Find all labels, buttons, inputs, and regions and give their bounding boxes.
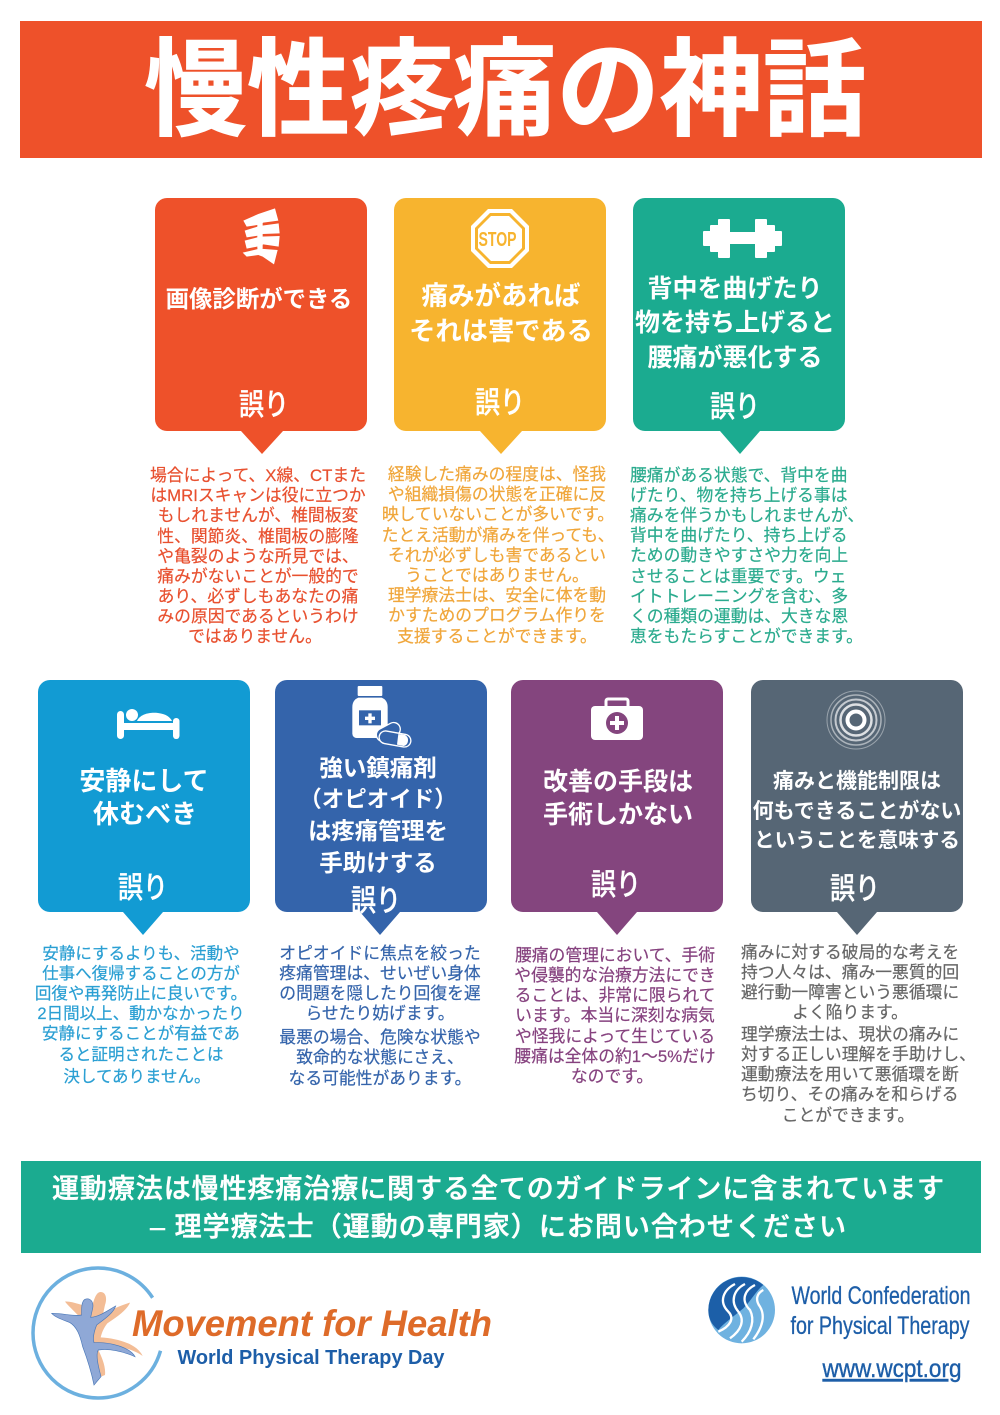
panel: opioid myth card: 手助けする <box>319 850 437 876</box>
icon: spine <box>243 208 280 264</box>
text: surgery explanation <box>514 946 716 1086</box>
text: imaging explanation: 場合によって、X線、CTまた <box>150 466 366 485</box>
panel: pain means harm myth card: 痛みがあれば <box>422 281 581 311</box>
text: pain and harm explanation <box>382 465 614 646</box>
text: bending and lifting explanation: ための動きやすさや力を向上 <box>630 546 848 565</box>
text: pain and harm explanation: や組織損傷の状態を正確に反 <box>388 485 606 504</box>
text: bending and lifting explanation: くの種類の運動は、大きな恩 <box>630 607 848 626</box>
text: surgery explanation: や侵襲的な治療方法にでき <box>514 966 716 985</box>
logo: Movement for Health: Movement for Health <box>132 1303 492 1344</box>
text: opioid explanation: 疼痛管理は、せいぜい身体 <box>279 964 481 983</box>
text: surgery explanation: 腰痛の管理において、手術 <box>515 946 715 965</box>
text: imaging explanation: あり、必ずしもあなたの痛 <box>158 587 358 606</box>
panel: pain and disability myth card <box>751 680 963 935</box>
panel: pain means harm myth card: 誤り <box>475 387 525 420</box>
icon: radiating pain target <box>827 691 885 749</box>
text: imaging explanation: 性、関節炎、椎間板の膨隆 <box>157 527 359 546</box>
text: surgery explanation: なのです。 <box>571 1067 653 1086</box>
panel: bending and lifting myth card: 誤り <box>710 391 760 424</box>
text: imaging explanation: 痛みがないことが一般的で <box>157 567 359 586</box>
text: rest explanation: 回復や再発防止に良いです。 <box>35 984 247 1003</box>
panel: pain means harm myth card <box>394 198 606 454</box>
text: pain and disability explanation: 痛みに対する破局的な考えを <box>741 943 959 962</box>
text: bending and lifting explanation: げたり、物を持ち上げる事は <box>630 486 848 505</box>
panel: opioid myth card: 誤り <box>351 885 401 918</box>
panel: rest myth card: 誤り <box>118 872 168 905</box>
panel: bending and lifting myth card: 物を持ち上げると <box>635 309 835 337</box>
icon: pill bottle and capsules <box>352 686 412 748</box>
text: rest explanation: 安静にすることが有益であ <box>42 1024 240 1043</box>
text: surgery explanation: 腰痛は全体の約1～5%だけ <box>514 1047 716 1066</box>
text: pain and disability explanation: ことができます。 <box>782 1106 914 1125</box>
icon: dumbbell <box>703 219 782 258</box>
logo: Movement for Health <box>33 1268 492 1398</box>
logo: World Confederation for Physical Therapy: www.wcpt.org <box>822 1355 962 1383</box>
text: pain and disability explanation: 理学療法士は、現状の痛みに <box>741 1025 959 1044</box>
icon: stop sign: STOP <box>478 229 516 251</box>
panel: opioid myth card <box>275 680 487 935</box>
icon: stop sign <box>471 209 529 268</box>
text: pain and harm explanation: たとえ活動が痛みを伴っても、 <box>382 526 614 545</box>
text: opioid explanation: の問題を隠したり回復を遅 <box>279 984 481 1003</box>
logo: Movement for Health: World Physical Therapy Day <box>178 1347 445 1369</box>
callout: exercise therapy banner <box>21 1161 981 1253</box>
text: pain and harm explanation: 経験した痛みの程度は、怪我 <box>388 465 606 484</box>
text: surgery explanation: ることは、非常に限られて <box>515 986 715 1005</box>
panel: bending and lifting myth card: 背中を曲げたり <box>647 275 823 303</box>
text: bending and lifting explanation: 背中を曲げたり、持ち上げる <box>630 526 848 545</box>
text: pain and disability explanation: 運動療法を用いて悪循環を断 <box>741 1065 959 1084</box>
panel: pain means harm myth card: それは害である <box>409 316 593 346</box>
text: rest explanation: 決してありません。 <box>63 1067 211 1086</box>
text: opioid explanation: なる可能性があります。 <box>289 1069 471 1088</box>
panel: rest myth card <box>38 680 250 935</box>
panel: pain and disability myth card: 何もできることがない <box>753 799 961 823</box>
callout: exercise therapy banner: – 理学療法士（運動の専門家）にお問い合わせください <box>150 1212 846 1242</box>
panel: pain and disability myth card: ということを意味する <box>754 829 960 852</box>
text: imaging explanation <box>150 466 366 646</box>
text: rest explanation: 2日間以上、動かなかったり <box>37 1004 245 1023</box>
text: pain and disability explanation: 避行動一障害という悪循環に <box>741 983 959 1002</box>
panel: bending and lifting myth card: 腰痛が悪化する <box>647 343 823 372</box>
icon: WCPT globe <box>708 1277 775 1343</box>
panel: imaging myth card <box>155 198 367 454</box>
text: pain and harm explanation: 映していないことが多いです。 <box>382 505 614 524</box>
text: surgery explanation: や怪我によって生じている <box>515 1027 715 1046</box>
text: opioid explanation: オピオイドに焦点を絞った <box>279 944 481 963</box>
icon: bed <box>117 709 180 739</box>
icon: first aid kit <box>591 699 643 740</box>
panel: opioid myth card: は疼痛管理を <box>308 818 448 844</box>
text: opioid explanation: らせたり妨げます。 <box>305 1004 455 1023</box>
panel: opioid myth card: （オピオイド） <box>299 787 457 812</box>
text: pain and harm explanation: それが必ずしも害であるとい <box>388 546 606 565</box>
text: bending and lifting explanation: させることは重要です。ウェ <box>630 567 846 586</box>
text: pain and harm explanation: 支援することができます。 <box>397 627 597 646</box>
text: rest explanation: ると証明されたことは <box>58 1045 224 1064</box>
text: surgery explanation: います。本当に深刻な病気 <box>515 1006 715 1025</box>
text: rest explanation: 仕事へ復帰することの方が <box>42 964 240 983</box>
text: imaging explanation: もしれませんが、椎間板変 <box>158 506 358 525</box>
text: imaging explanation: や亀裂のような所見では、 <box>157 547 359 566</box>
text: imaging explanation: はMRIスキャンは役に立つか <box>150 486 366 505</box>
text: bending and lifting explanation: 恵をもたらすことができます。 <box>630 627 863 646</box>
text: opioid explanation: 致命的な状態にさえ、 <box>296 1048 464 1067</box>
icon: orange and blue figures <box>52 1292 143 1385</box>
text: bending and lifting explanation: 痛みを伴うかもしれませんが、 <box>630 506 864 525</box>
text: opioid explanation <box>279 944 481 1088</box>
panel: bending and lifting myth card <box>633 198 845 454</box>
text: pain and disability explanation <box>741 943 976 1125</box>
text: pain and disability explanation: 対する正しい理解を手助けし、 <box>741 1045 976 1064</box>
text: pain and disability explanation: よく陥ります。 <box>792 1003 908 1022</box>
panel: rest myth card: 安静にして <box>79 766 209 796</box>
text: pain and harm explanation: うことではありません。 <box>405 566 589 585</box>
text: opioid explanation: 最悪の場合、危険な状態や <box>279 1028 481 1047</box>
panel: imaging myth card: 画像診断ができる <box>166 285 352 312</box>
panel: surgery myth card: 改善の手段は <box>543 768 693 796</box>
callout: exercise therapy banner: 運動療法は慢性疼痛治療に関する全てのガイドラインに含まれています <box>52 1174 944 1204</box>
logo: World Confederation for Physical Therapy <box>708 1277 970 1383</box>
title banner <box>20 21 982 158</box>
text: bending and lifting explanation: 腰痛がある状態で、背中を曲 <box>630 466 848 485</box>
text: rest explanation: 安静にするよりも、活動や <box>42 944 240 963</box>
text: imaging explanation: みの原因であるというわけ <box>157 607 359 626</box>
text: pain and disability explanation: 持つ人々は、痛み一悪質的回 <box>741 963 959 982</box>
title banner: 慢性疼痛の神話 <box>144 32 866 150</box>
panel: pain and disability myth card: 痛みと機能制限は <box>773 770 941 793</box>
panel: surgery myth card: 手術しかない <box>543 801 693 829</box>
text: imaging explanation: ではありません。 <box>188 627 322 646</box>
text: pain and disability explanation: ち切り、その痛みを和らげる <box>741 1085 958 1104</box>
text: pain and harm explanation: 理学療法士は、安全に体を動 <box>388 586 606 605</box>
icon: ring around figures <box>33 1268 163 1398</box>
text: bending and lifting explanation: イトトレーニングを含む、多 <box>630 587 848 606</box>
panel: pain and disability myth card: 誤り <box>830 873 880 906</box>
text: pain and harm explanation: かすためのプログラム作りを <box>388 606 606 625</box>
panel: rest myth card: 休むべき <box>93 799 197 829</box>
text: rest explanation <box>35 944 247 1086</box>
panel: surgery myth card: 誤り <box>591 869 641 902</box>
panel: imaging myth card: 誤り <box>239 389 289 422</box>
text: bending and lifting explanation <box>630 466 864 646</box>
panel: opioid myth card: 強い鎮痛剤 <box>319 755 437 781</box>
panel: surgery myth card <box>511 680 723 935</box>
